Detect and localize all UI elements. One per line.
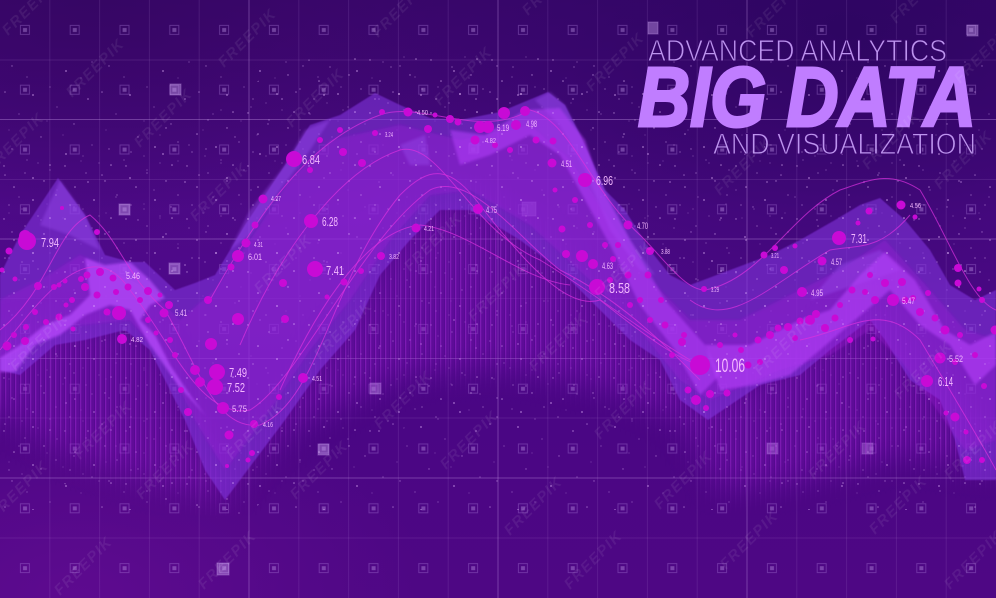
small values: 5.75 [232, 404, 247, 414]
watermarks: FREEPIK [526, 309, 591, 375]
tiny values: 4.31 [254, 242, 263, 249]
watermarks: FREEPIK [215, 5, 280, 71]
watermarks: FREEPIK [287, 437, 352, 503]
tiny values: 4.27 [271, 196, 281, 203]
small values [126, 119, 963, 414]
medium values: 7.94 [41, 235, 59, 250]
watermarks: FREEPIK [7, 309, 72, 375]
watermarks: FREEPIK [931, 127, 996, 193]
watermarks: FREEPIK [63, 35, 128, 101]
medium values: 6.96 [596, 173, 613, 188]
watermarks: FREEPIK [187, 159, 252, 225]
watermarks: FREEPIK [651, 447, 716, 513]
tiny values: 3.29 [711, 287, 719, 294]
watermarks: FREEPIK [866, 472, 931, 538]
watermarks: FREEPIK [195, 527, 260, 593]
tiny values: 4.51 [312, 376, 322, 383]
data points along the wave [0, 106, 996, 468]
watermarks: FREEPIK [591, 377, 656, 443]
tiny values: 4.50 [417, 110, 428, 117]
tiny values: 4.82 [131, 337, 143, 344]
watermarks: FREEPIK [223, 397, 288, 463]
small values: 5.41 [175, 308, 187, 318]
small values: 5.47 [902, 296, 915, 306]
tiny values: 4.82 [485, 138, 496, 145]
speckle over the wave [0, 92, 996, 500]
watermarks: FREEPIK [891, 337, 956, 403]
watermarks: FREEPIK [251, 231, 316, 297]
medium values [41, 152, 953, 395]
tiny values: 4.56 [910, 203, 921, 210]
trend lines [0, 110, 996, 470]
wave: upper light lobes [40, 92, 900, 300]
tiny values: 3.24 [385, 132, 393, 139]
watermarks: FREEPIK [131, 85, 196, 151]
watermarks: FREEPIK [751, 313, 816, 379]
tiny values: 3.82 [389, 254, 399, 261]
small values: 4.63 [602, 261, 613, 271]
scattered data points [0, 50, 996, 520]
medium values: 6.28 [322, 214, 338, 229]
watermarks: FREEPIK [859, 107, 924, 173]
wave: inner magenta body [0, 125, 996, 470]
watermarks: FREEPIK [591, 237, 656, 303]
watermarks: FREEPIK [437, 407, 502, 473]
medium values: 7.31 [851, 231, 867, 246]
title line: Advanced Analytics: ADVANCED ANALYTICS [648, 33, 947, 68]
watermarks: FREEPIK [501, 473, 566, 539]
watermarks: FREEPIK [431, 43, 496, 109]
small values: 4.75 [486, 205, 497, 215]
small values: 4.98 [526, 119, 537, 129]
tiny values: 4.16 [263, 422, 273, 429]
watermarks: FREEPIK [401, 209, 466, 275]
watermarks: FREEPIK [283, 65, 348, 131]
medium values: 6.14 [938, 374, 953, 389]
medium values: 8.58 [609, 280, 630, 297]
small values: 6.01 [248, 252, 262, 262]
small values: 4.95 [811, 288, 823, 298]
title block [638, 33, 976, 161]
small values: 4.70 [637, 221, 648, 231]
watermarks: FREEPIK [371, 367, 436, 433]
watermarks: FREEPIK [583, 29, 648, 95]
watermarks: FREEPIK [311, 297, 376, 363]
medium values: 7.49 [229, 365, 247, 380]
wave: centre bright ribbon [450, 108, 720, 395]
watermarks: FREEPIK [561, 527, 626, 593]
tiny values: 3.21 [771, 253, 779, 260]
small values: 5.46 [126, 271, 140, 281]
watermarks: FREEPIK [71, 397, 136, 463]
watermarks: FREEPIK [51, 533, 116, 598]
watermarks: FREEPIK [711, 133, 776, 199]
wave: outer translucent envelope [0, 92, 996, 500]
wave chart [0, 92, 996, 500]
watermarks: FREEPIK [717, 507, 782, 573]
medium values: 6.84 [302, 152, 320, 167]
medium values: 7.52 [227, 380, 245, 395]
tiny values: 4.21 [424, 226, 434, 233]
wave: left bright ribbon [0, 258, 215, 428]
small values: 5.52 [949, 354, 963, 364]
small values: 5.19 [497, 123, 509, 133]
wave: right bright ribbon [705, 252, 996, 390]
vertical stripes under the wave [0, 194, 996, 506]
tiny values: 3.88 [661, 249, 670, 256]
tiny values [131, 110, 921, 429]
watermarks: FREEPIK [805, 417, 870, 483]
small values: 4.57 [831, 257, 842, 267]
medium values: 7.41 [326, 263, 344, 278]
watermarks: FREEPIK [465, 259, 530, 325]
watermarks: FREEPIK [133, 437, 198, 503]
value labels [41, 110, 963, 429]
small values: 4.51 [561, 159, 572, 169]
large value: 10.06: 10.06 [715, 356, 745, 377]
